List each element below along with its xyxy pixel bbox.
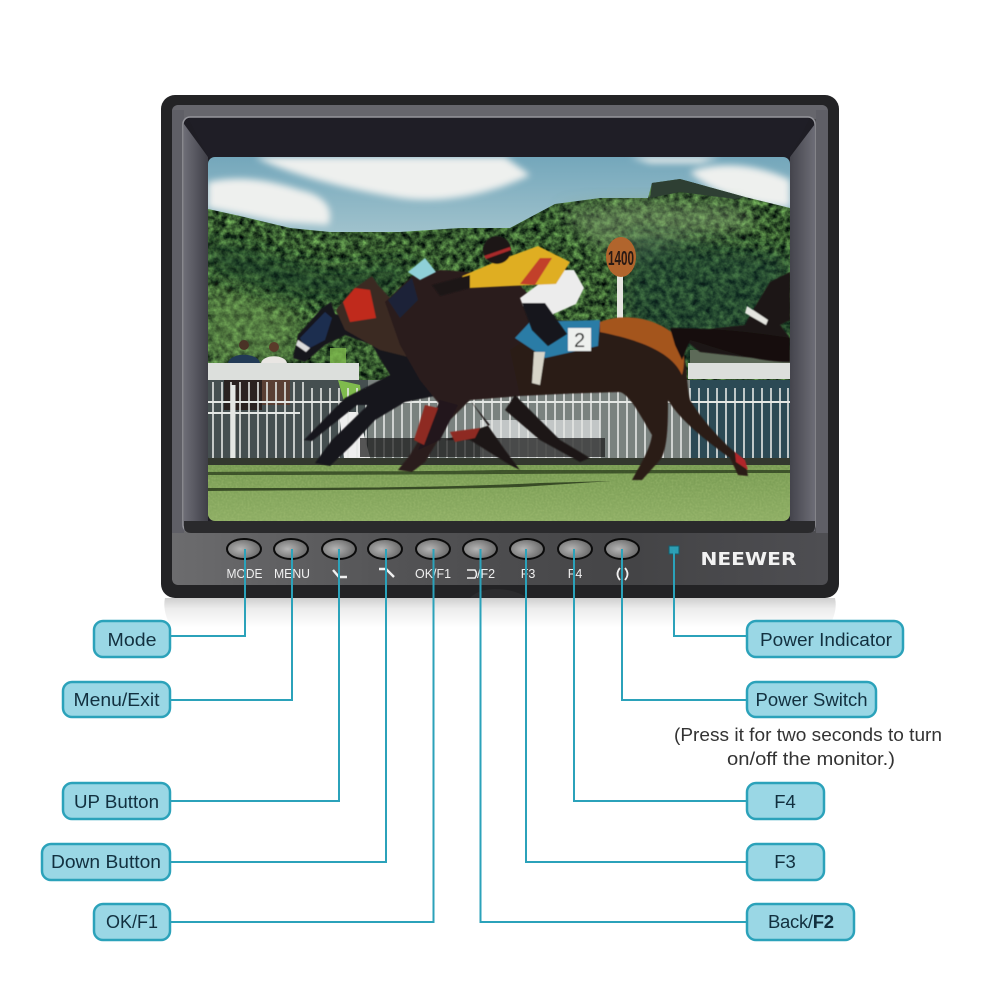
label: Power Switch: Power Switch: [756, 689, 868, 710]
label: Menu/Exit: [63, 682, 170, 717]
grey bezel: [172, 105, 828, 585]
button legends: OK/F1: [415, 567, 451, 581]
power switch note: [674, 724, 942, 769]
jockey: [408, 236, 584, 346]
sky: [208, 157, 790, 232]
hills: [208, 179, 790, 380]
label: Power Indicator: Power Indicator: [760, 629, 892, 650]
control panel strip shading: [172, 533, 828, 585]
button legends: /F2: [477, 567, 495, 581]
monitor: [161, 95, 839, 628]
power switch note: on/off the monitor.): [727, 748, 895, 769]
button legends: MENU: [274, 567, 310, 581]
label: OK/F1: [94, 904, 170, 940]
white fence: [208, 382, 790, 460]
top bezel band: [172, 105, 828, 119]
label: UP Button: UP Button: [74, 791, 159, 812]
clouds: [208, 157, 790, 225]
distance marker sign: [606, 237, 636, 320]
label: UP Button: [63, 783, 170, 819]
front black horse: [293, 302, 440, 466]
button legends: F3: [521, 567, 535, 581]
label: Power Switch: [747, 682, 876, 717]
track edge: [208, 458, 790, 465]
background behind fence: [208, 350, 790, 460]
label: Back/F2: Back/F2: [768, 911, 834, 932]
label: Power Indicator: [747, 621, 903, 657]
dark bench behind fence: [360, 438, 605, 457]
label: Menu/Exit: Menu/Exit: [74, 689, 160, 710]
monitor reflection: [164, 598, 836, 628]
central dark horses: [385, 269, 574, 472]
saddle cloth: [515, 320, 600, 358]
girth strap: [532, 352, 545, 385]
recess around screen: [183, 117, 815, 533]
spectators: [224, 340, 372, 468]
infographic: monitor button guide: [40, 95, 941, 942]
brown horse: [561, 317, 748, 481]
grass: [208, 465, 790, 521]
number cloth: 2: [574, 330, 585, 352]
red hooded horse: [336, 276, 406, 357]
label: Down Button: Down Button: [51, 851, 161, 872]
brand logo: NEEWER: [700, 549, 797, 570]
button legends: [226, 567, 628, 581]
number cloth: [568, 328, 591, 352]
label: Back/F2: [747, 904, 854, 940]
label: OK/F1: OK/F1: [106, 911, 158, 932]
label: Down Button: [42, 844, 170, 880]
white rails: [208, 363, 790, 380]
bezel side bands: [172, 110, 828, 534]
label: F4: F4: [774, 791, 796, 812]
bottom frame stand: [470, 589, 528, 598]
label: F4: [747, 783, 824, 819]
power switch note: (Press it for two seconds to turn: [674, 724, 942, 745]
front panel buttons: [227, 539, 639, 559]
outer frame: [161, 95, 839, 598]
label: F3: F3: [774, 851, 796, 872]
screen photo: horse race: [208, 157, 790, 521]
button legends: F4: [568, 567, 582, 581]
tail of brown horse: [670, 328, 790, 362]
leader lines: [170, 549, 747, 922]
label: Mode: [94, 621, 170, 657]
label: Mode: Mode: [108, 629, 156, 650]
horses: [293, 270, 790, 480]
label: F3: [747, 844, 824, 880]
power LED: [669, 546, 679, 554]
distance marker sign: 1400: [608, 248, 634, 270]
right horse and tail: [688, 272, 790, 358]
button legends: MODE: [226, 567, 262, 581]
